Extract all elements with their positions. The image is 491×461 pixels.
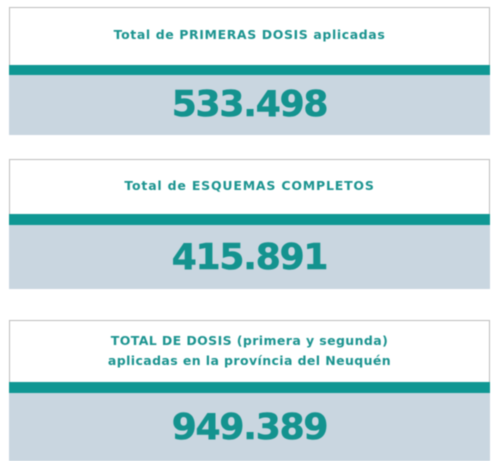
panel: primeras dosis <box>8 6 491 136</box>
header box <box>9 320 490 382</box>
header box <box>9 7 490 65</box>
heading: total de dosis: aplicadas en la província del Neuquén <box>108 353 391 368</box>
value background <box>9 225 490 289</box>
panel: total de dosis <box>8 320 491 461</box>
teal divider bar <box>9 65 490 75</box>
value background <box>9 393 490 461</box>
heading: total de dosis <box>108 333 391 368</box>
header box <box>9 159 490 214</box>
panel: esquemas completos <box>8 158 491 290</box>
heading: esquemas completos: Total de ESQUEMAS COMPLETOS <box>124 178 375 193</box>
number: esquemas completos: 415.891 <box>172 237 327 278</box>
heading: total de dosis: TOTAL DE DOSIS (primera y segunda) <box>111 333 388 348</box>
teal divider bar <box>9 214 490 225</box>
number: total de dosis: 949.389 <box>172 407 327 448</box>
heading: primeras dosis: Total de PRIMERAS DOSIS aplicadas <box>114 27 385 42</box>
number: primeras dosis: 533.498 <box>172 84 327 125</box>
value background <box>9 75 490 135</box>
teal divider bar <box>9 382 490 393</box>
